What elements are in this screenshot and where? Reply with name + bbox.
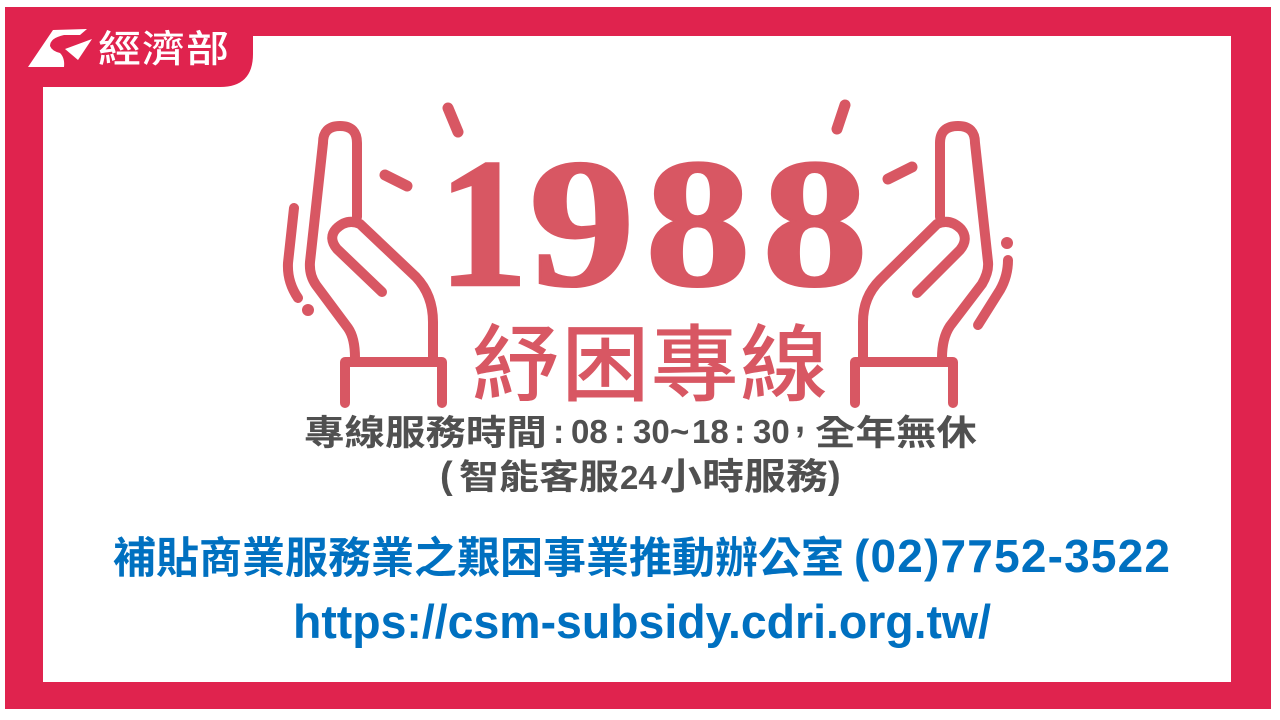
- smart service note: [440, 455, 841, 497]
- hotline number: [438, 121, 868, 325]
- ministry logo: [28, 29, 229, 70]
- hotline number: 9: [529, 121, 635, 325]
- smart service note: (: [440, 455, 453, 497]
- smart service note: 24: [620, 459, 657, 496]
- service hours: 專線服務時間: [304, 414, 547, 453]
- office name and phone: (02)7752-3522: [854, 530, 1170, 582]
- service hours: :: [734, 413, 745, 451]
- service hours: ~: [670, 413, 689, 450]
- service hours: 18: [692, 413, 729, 450]
- service hours: :: [553, 413, 564, 451]
- service hours: 08: [571, 413, 608, 450]
- smart service note: 智能客服: [459, 457, 619, 496]
- service hours: 全年無休: [815, 414, 977, 453]
- service hours: [304, 399, 977, 453]
- hotline number: 1: [438, 122, 528, 325]
- hotline number: 8: [762, 121, 868, 325]
- office name and phone: 補貼商業服務業之艱困事業推動辦公室: [113, 535, 844, 583]
- hotline title: 紓困專線: [472, 319, 828, 413]
- website address: https://csm-subsidy.cdri.org.tw/: [293, 595, 991, 648]
- office name and phone: [113, 530, 1170, 583]
- service hours: :: [614, 413, 625, 451]
- service hours: ,: [795, 399, 805, 440]
- smart service note: 小時服務: [660, 457, 828, 497]
- smart service note: ): [828, 455, 841, 497]
- hotline number: 8: [645, 121, 751, 325]
- service hours: 30: [753, 413, 790, 450]
- left hand illustration: [288, 108, 458, 403]
- ministry name: 經濟部: [98, 29, 229, 70]
- icon: ministry emblem: [28, 29, 92, 67]
- service hours: 30: [633, 413, 670, 450]
- right hand illustration: [837, 105, 1013, 403]
